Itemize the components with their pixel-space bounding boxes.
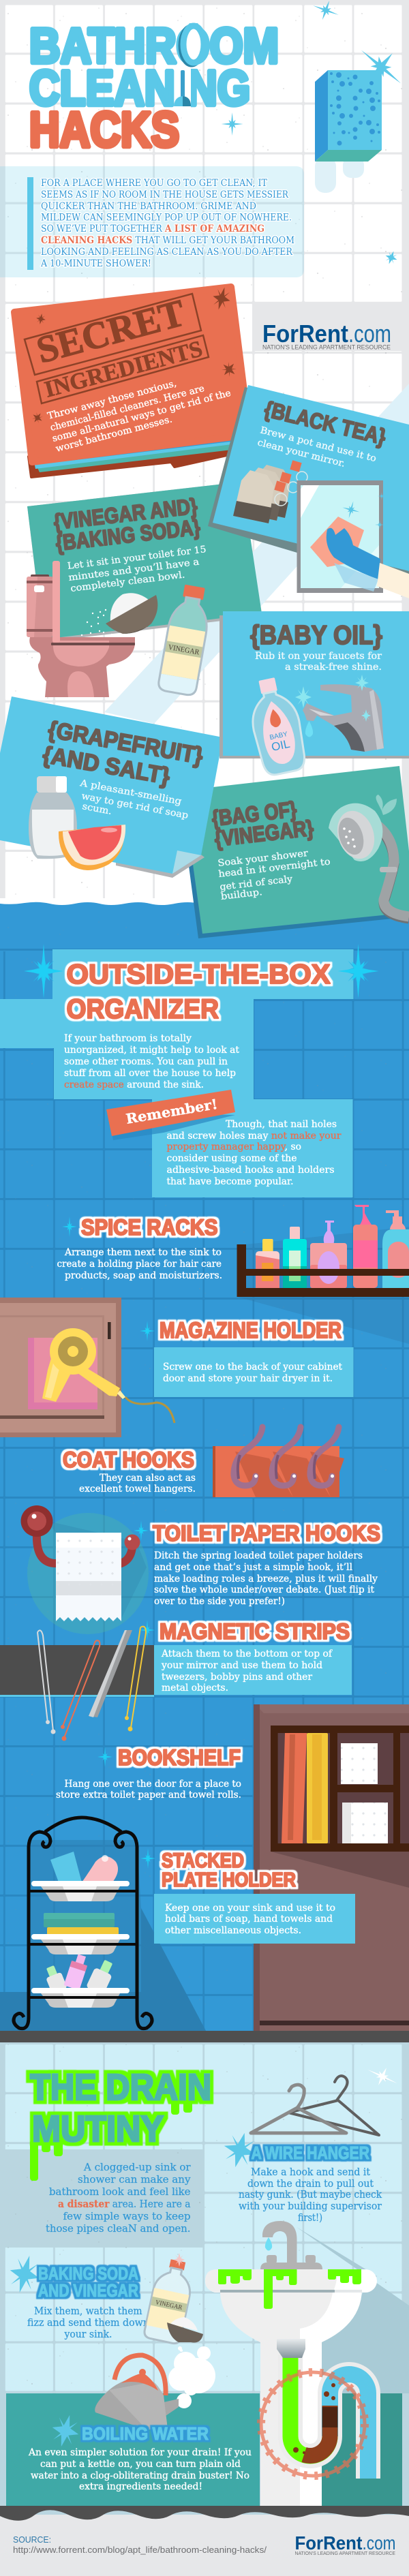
title: the drain mutiny: MUTINY [32, 2109, 164, 2149]
text: remember: adhesive-based hooks and holders [166, 1165, 335, 1176]
text: a wire hanger: nasty gunk. (But maybe check [239, 2190, 382, 2201]
source text: http://www.forrent.com/blog/apt_life/bathroom-cleaning-hacks/ [13, 2545, 267, 2555]
icon: sparkle [5, 2252, 44, 2297]
title: the drain mutiny [30, 2067, 211, 2181]
icon: steam bubbles [168, 2346, 215, 2408]
heading: baking soda and vinegar: AND VINEGAR [38, 2282, 138, 2301]
icon: sponge [315, 70, 382, 193]
icon: vinegar bottle [157, 583, 214, 696]
heading: spice racks: SPICE RACKS [81, 1215, 218, 1240]
card: baby oil [219, 611, 409, 778]
icon: sparkle [140, 1620, 155, 1640]
card: bag of vinegar [179, 766, 409, 938]
text: remember: and screw holes may not make your [166, 1131, 342, 1141]
title line: Cleaning: CLEANING [29, 61, 250, 116]
text: organizer intro: unorganized, it might help to look at [64, 1045, 240, 1056]
logo: ForRent footer: NATION'S LEADING APARTMENT RESOURCE [294, 2551, 395, 2556]
footer: wavy floor and background [0, 2506, 409, 2576]
text: boiling water: extra ingredients needed! [79, 2481, 202, 2492]
heading: black tea: {BLACK TEA} [262, 397, 389, 449]
text: organizer intro: If your bathroom is totally [64, 1033, 192, 1044]
icon: baby oil bottle: OIL [270, 737, 291, 754]
background: pale blue tile wall [0, 2042, 409, 2519]
icon: salt shaker [29, 776, 77, 859]
section: bookshelf [56, 1704, 409, 2031]
intro paragraph [40, 178, 294, 269]
section: coat hooks [63, 1427, 344, 1497]
text: secret ingredients intro: worst bathroom messes. [55, 414, 173, 455]
intro paragraph: FOR A PLACE WHERE YOU GO TO GET CLEAN, IT [41, 178, 268, 189]
title: the drain mutiny: THE DRAIN [30, 2067, 211, 2108]
text: vinegar and baking soda: minutes and you’ll have a [68, 557, 200, 583]
icon: sparkle [219, 2129, 260, 2171]
pale light band behind the cards [104, 384, 409, 724]
heading: grapefruit and salt [41, 716, 205, 790]
heading: outside-the-box organizer: OUTSIDE-THE-BOX [67, 960, 331, 990]
section: magazine holder [0, 1298, 353, 1437]
text: vinegar and baking soda: Let it sit in your toilet for 15 [67, 544, 207, 572]
panel: magnetic strips text: metal objects. [162, 1683, 228, 1693]
intro paragraph: LOOKING AND FEELING AS CLEAN AS YOU DO AFTER [41, 247, 292, 258]
text: bag of vinegar: Soak your shower [217, 848, 309, 869]
text: coat hooks: They can also act as [100, 1473, 196, 1484]
title line: Bathroom: BATHROOM [29, 19, 279, 74]
text: baby oil: a streak-free shine. [285, 662, 382, 673]
panel: outside-the-box organizer [0, 944, 379, 1197]
wavy magnifier ring [261, 2372, 365, 2476]
intro paragraph: SEEMS AS IF NO ROOM IN THE HOUSE GETS MESSIER [41, 189, 288, 200]
section: boiling water [28, 2412, 252, 2492]
text: baking soda and vinegar: your sink. [64, 2329, 112, 2340]
logo: ForRent footer [294, 2532, 395, 2556]
heading: vinegar and baking soda: {BAKING SODA} [55, 515, 201, 555]
card: black tea [208, 385, 409, 598]
text: toilet paper hooks: and get one that’s just a simple hook, it’ll [154, 1562, 352, 1573]
icon: plunger [174, 68, 191, 108]
text: a wire hanger: with your building supervisor [239, 2201, 382, 2212]
heading: stacked plate holder: PLATE HOLDER [162, 1869, 296, 1891]
icon: shower head in a bag [329, 795, 409, 919]
heading: magazine holder: MAGAZINE HOLDER [160, 1318, 342, 1343]
floor strip [0, 2031, 409, 2042]
text: toilet paper hooks: solve the whole under/over debate. (Just flip it [154, 1584, 375, 1595]
icon: cabinet door with hair dryer [0, 1298, 175, 1437]
card: grapefruit and salt [0, 696, 223, 878]
icon: hook rack [213, 1427, 344, 1497]
banner: remember [106, 1090, 235, 1140]
text: a wire hanger [239, 2167, 382, 2224]
band: teal lower wall [6, 2393, 402, 2506]
icon: baby oil bottle: BABY [269, 731, 288, 741]
heading: baby oil: {BABY OIL} [250, 621, 382, 650]
panel: magnetic strips text [154, 1645, 352, 1695]
heading: bag of vinegar [211, 797, 315, 851]
heading: bag of vinegar: {BAG OF} [211, 797, 298, 831]
banner: remember: Remember! [125, 1096, 219, 1127]
icon: toilet [27, 561, 135, 697]
panel: stacked plate holder text: other miscellaneous objects. [165, 1925, 301, 1936]
panel: stacked plate holder text [154, 1894, 355, 1944]
sparkles: organizer heading [24, 944, 379, 998]
heading: toilet paper hooks: TOILET PAPER HOOKS [153, 1521, 380, 1546]
text: drain intro [46, 2162, 191, 2235]
text: grapefruit and salt [78, 778, 190, 821]
text: organizer intro [64, 1033, 240, 1090]
background: white tile wall [0, 0, 409, 906]
heading: bookshelf: BOOKSHELF [118, 1745, 241, 1770]
icon: tea bags [233, 460, 307, 523]
text: grapefruit and salt: way to get rid of soap [80, 791, 190, 821]
text: toilet paper hooks: Ditch the spring loaded toilet paper holders [154, 1550, 363, 1561]
icon: clogged sink [205, 2221, 409, 2506]
icon: vinegar bottle and bowl: VINEGAR [155, 2299, 183, 2312]
text: remember [166, 1119, 342, 1187]
intro paragraph: QUICKER THAN THE BATHROOM. GRIME AND [41, 201, 256, 212]
stamp: secret ingredients [25, 292, 209, 403]
icon: mirror being wiped [297, 480, 409, 598]
panel: magazine holder text: door and store your hair dryer in it. [163, 1373, 333, 1384]
text: drain intro: shower can make any [78, 2175, 191, 2186]
heading: grapefruit and salt: {AND SALT} [41, 741, 172, 790]
text: grapefruit and salt: scum. [81, 801, 112, 817]
text: secret ingredients intro: chemical-filled cleaners. Here are [49, 383, 206, 433]
text: a wire hanger: first!) [298, 2213, 322, 2224]
drain trap pipe [290, 2355, 368, 2479]
text: boiling water: An even simpler solution for your drain! If you [28, 2447, 252, 2458]
sparkles: title area [222, 0, 409, 266]
section: baking soda and vinegar [5, 2252, 215, 2429]
text: drain intro: bathroom look and feel like [49, 2187, 191, 2198]
heading: a wire hanger: A WIRE HANGER [251, 2144, 369, 2163]
logo: ForRent footer: .com [363, 2532, 395, 2554]
text: black tea: clean your mirror. [256, 437, 346, 470]
intro paragraph: A 10-MINUTE SHOWER! [40, 258, 151, 269]
panel: magnetic strips text: tweezers, bobby pins and other [162, 1672, 313, 1683]
icon: sparkle [140, 1848, 155, 1869]
text: bag of vinegar: head in it overnight to [218, 856, 331, 880]
slime drips [30, 2099, 192, 2181]
text: bookshelf [56, 1779, 241, 1800]
text: bag of vinegar: get rid of scaly [219, 874, 293, 893]
logo: ForRent top: NATION'S LEADING APARTMENT RESOURCE [262, 343, 391, 350]
heading: vinegar and baking soda: {VINEGAR AND} [52, 493, 198, 534]
heading: baking soda and vinegar [38, 2265, 138, 2301]
text: spice racks [57, 1247, 222, 1281]
text: remember: that have become popular. [166, 1176, 293, 1187]
icon: sparkle [97, 1747, 112, 1767]
icon: baking soda bowl [81, 593, 157, 636]
heading: stacked plate holder [162, 1850, 296, 1891]
text: vinegar and baking soda [67, 544, 207, 594]
text: baking soda and vinegar: fizz and send them down [27, 2318, 149, 2329]
icon: sparkle [48, 2412, 83, 2450]
icon: toilet seat [181, 23, 204, 64]
logo: ForRent top: ForRent [262, 320, 348, 348]
text: drain intro: those pipes cleaN and open. [46, 2224, 191, 2235]
text: toilet paper hooks: over to the side you prefer!) [154, 1596, 285, 1607]
heading: outside-the-box organizer [67, 960, 331, 1024]
background: blue tile wall with wavy top [0, 898, 409, 2034]
text: baking soda and vinegar: Mix them, watch them [34, 2306, 142, 2317]
panel: stacked plate holder text: Keep one on your sink and use it to [165, 1903, 335, 1914]
text: toilet paper hooks: make loading roles a breeze, plus it will finally [154, 1574, 378, 1584]
text: bag of vinegar: buildup. [220, 887, 263, 902]
icon: grapefruit [59, 825, 125, 870]
basin [220, 2290, 362, 2506]
text: a wire hanger: down the drain to pull out [247, 2179, 374, 2190]
text: baby oil [255, 651, 382, 673]
intro paragraph: CLEANING HACKS THAT WILL GET YOUR BATHROOM [41, 235, 294, 246]
icon: wire hangers [251, 2076, 379, 2135]
section: wire hanger [219, 2061, 402, 2224]
logo: ForRent top [252, 302, 409, 351]
panel: stacked plate holder text: hold bars of soap, hand towels and [165, 1914, 333, 1925]
heading: stacked plate holder: STACKED [162, 1850, 244, 1872]
text: drain intro: few simple ways to keep [63, 2211, 191, 2222]
heading: coat hooks: COAT HOOKS [63, 1447, 194, 1472]
card: secret ingredients folder [14, 285, 254, 477]
text: remember: Though, that nail holes [226, 1119, 337, 1130]
text: boiling water: can put a kettle on, you can turn plain old [40, 2459, 241, 2470]
heading: outside-the-box organizer: ORGANIZER [67, 994, 219, 1024]
logo: ForRent footer: ForRent [294, 2532, 363, 2554]
text: bag of vinegar [217, 848, 331, 902]
text: spice racks: create a holding place for hair care [57, 1259, 222, 1270]
heading: baking soda and vinegar: BAKING SODA [38, 2265, 138, 2284]
text: secret ingredients intro: Throw away those noxious, [46, 378, 178, 422]
text: boiling water [28, 2447, 252, 2492]
icon: baby oil bottle [244, 675, 309, 778]
text: boiling water: water into a clog-obliterating drain buster! No [31, 2470, 249, 2481]
intro paragraph: SO WE’VE PUT TOGETHER A LIST OF AMAZING [41, 224, 264, 234]
panel: magnetic strips text: your mirror and use them to hold [161, 1660, 322, 1671]
section: toilet paper hooks [20, 1505, 380, 1634]
section: stacked plate holder [0, 1818, 355, 2031]
text: baking soda and vinegar [27, 2306, 149, 2340]
text: vinegar and baking soda: completely clean bowl. [70, 569, 185, 594]
text: remember: property manager happy , so [166, 1141, 301, 1152]
stamp: secret ingredients: INGREDIENTS [42, 336, 205, 403]
card: vinegar and baking soda [27, 482, 262, 697]
text: a wire hanger: Make a hook and send it [251, 2167, 370, 2178]
text: coat hooks [79, 1473, 196, 1494]
heading: vinegar and baking soda [52, 493, 201, 555]
section: magnetic strips [0, 1619, 352, 1741]
icon: shiny faucet [295, 675, 384, 752]
text: spice racks: Arrange them next to the sink to [64, 1247, 222, 1258]
icon: toilet paper on hook [20, 1505, 149, 1634]
slime on the basin [218, 2269, 361, 2309]
text: bookshelf: store extra toilet paper and towel rolls. [56, 1790, 241, 1800]
panel: magazine holder text [154, 1347, 353, 1397]
text: drain intro: A clogged-up sink or [83, 2162, 191, 2173]
icon: vinegar bottle and bowl [143, 2253, 203, 2345]
icon: vinegar bottle: VINEGAR [168, 643, 200, 657]
text: secret ingredients intro: some all-natural ways to get rid of the [51, 388, 232, 444]
intro paragraph: MILDEW CAN SEEMINGLY POP UP OUT OF NOWHERE. [41, 213, 292, 224]
icon: kettle [95, 2355, 179, 2429]
text: coat hooks: excellent towel hangers. [79, 1484, 196, 1494]
icon: bottles on rack [237, 1205, 409, 1297]
icons: stamp splatters [30, 285, 239, 425]
source text: SOURCE: [13, 2535, 51, 2545]
heading: magnetic strips: MAGNETIC STRIPS [160, 1619, 350, 1644]
icon: sparkle [134, 1520, 149, 1541]
icon: tiered plate stand [14, 1818, 152, 2029]
text: organizer intro: some other rooms. You can pull in [64, 1056, 228, 1067]
text: black tea: Brew a pot and use it to [259, 425, 378, 464]
heading: boiling water: BOILING WATER [82, 2425, 209, 2444]
title [29, 19, 279, 157]
text: organizer intro: stuff from all over the house to help [64, 1068, 236, 1079]
icon: sparkle white [363, 2061, 402, 2092]
source text [13, 2535, 267, 2555]
stamp: secret ingredients: SECRET [32, 292, 190, 372]
faucet [260, 2221, 322, 2269]
icon: sparkle [62, 1216, 77, 1237]
panel: magazine holder text: Screw one to the back of your cabinet [163, 1362, 343, 1373]
icon: door with bookshelf [254, 1704, 409, 2031]
section: spice racks [57, 1205, 409, 1344]
text: remember: consider using some of the [166, 1153, 297, 1164]
text: toilet paper hooks [154, 1550, 378, 1607]
text: baby oil: Rub it on your faucets for [255, 651, 382, 662]
text: drain intro: a disaster area. Here are a [58, 2198, 191, 2210]
text: bookshelf: Hang one over the door for a place to [64, 1779, 241, 1790]
text: spice racks: products, soap and moisturizers. [65, 1270, 222, 1281]
heading: bag of vinegar: {VINEGAR} [213, 816, 315, 851]
heading: grapefruit and salt: {GRAPEFRUIT} [46, 716, 205, 769]
text: organizer intro: create space around the sink. [64, 1079, 204, 1090]
panel: magnetic strips text: Attach them to the bottom or top of [161, 1649, 333, 1659]
text: grapefruit and salt: A pleasant-smelling [78, 778, 183, 808]
icon: sparkle [140, 1321, 155, 1341]
text: secret ingredients intro [46, 378, 232, 455]
icon: magnetic strip with pins and tweezers [0, 1627, 154, 1741]
logo: ForRent top: .com [348, 320, 391, 348]
title line: Hacks: HACKS [29, 103, 179, 157]
panel: intro text [0, 166, 304, 277]
